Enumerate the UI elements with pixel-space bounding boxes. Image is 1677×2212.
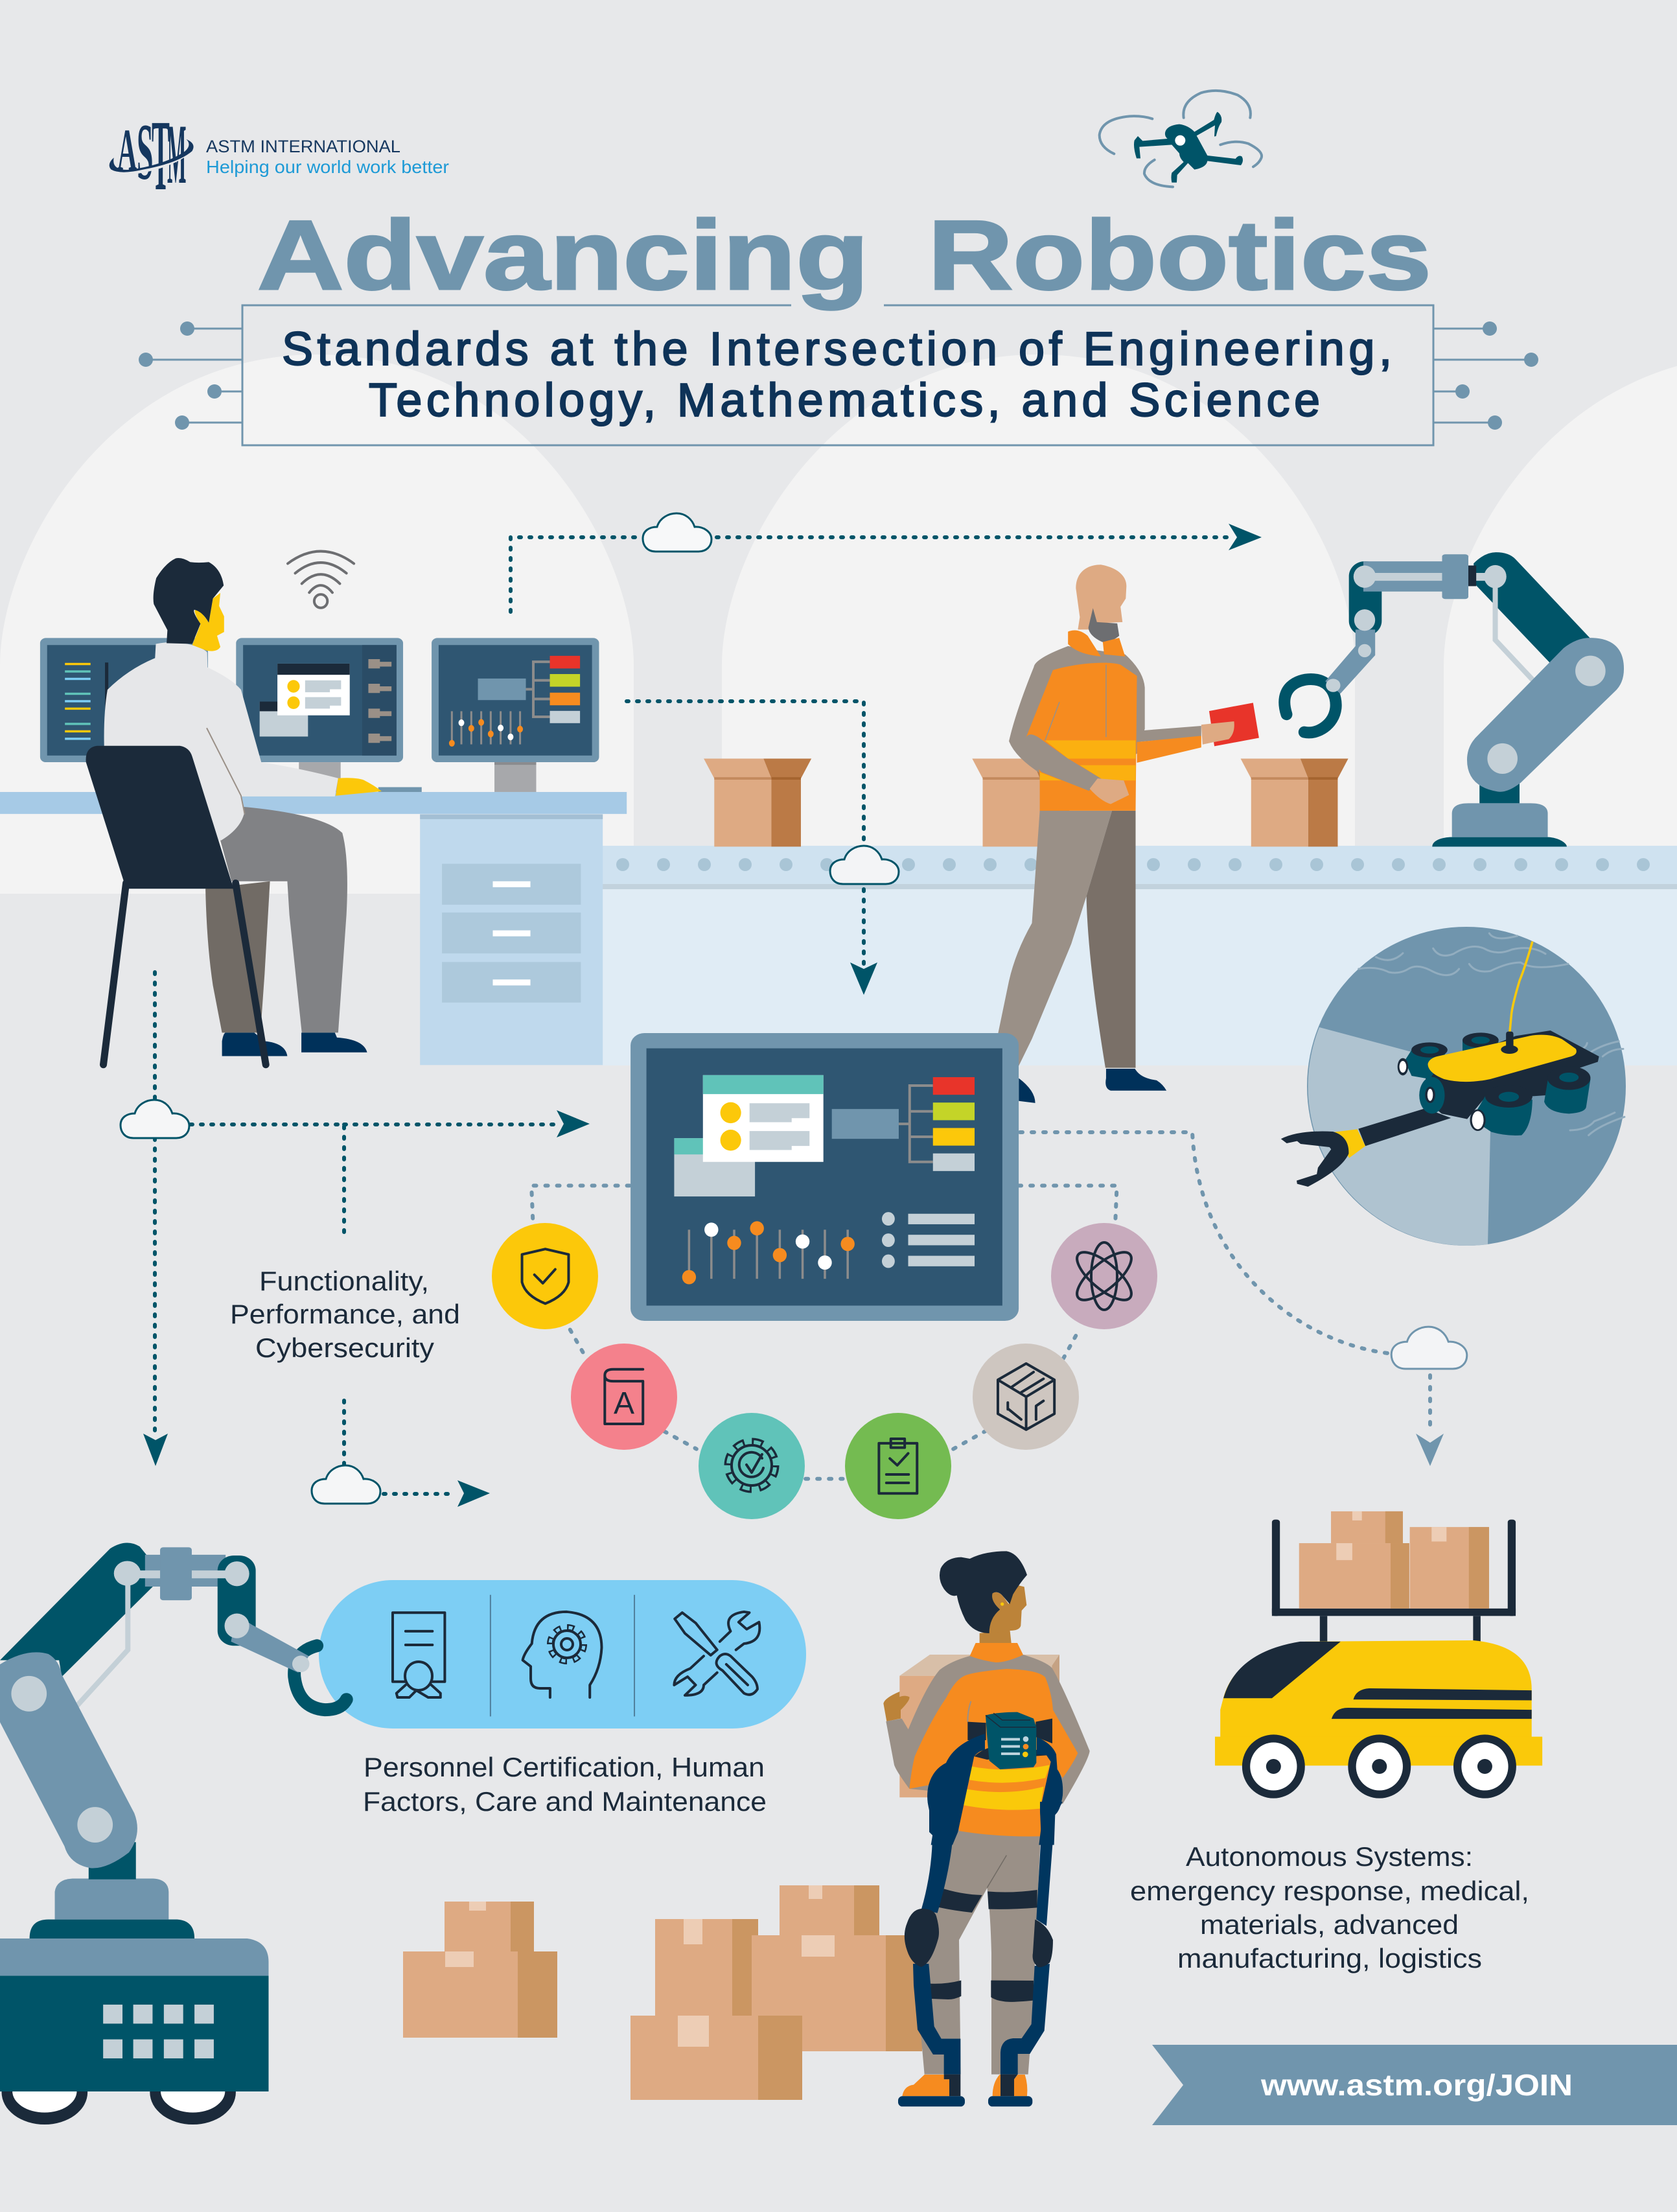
label: autonomous systems: manufacturing, logistics <box>1177 1943 1482 1973</box>
connector: dashboard to autonomous systems with cloud <box>1020 1132 1467 1466</box>
logo wordmark: ASTM INTERNATIONAL <box>206 137 400 156</box>
monitor: dashboard <box>432 638 599 762</box>
label: personnel certification <box>363 1752 767 1817</box>
logo mark: A <box>117 117 137 183</box>
seated engineer on chair <box>86 558 382 1065</box>
monitor: code lines <box>40 638 208 762</box>
cardboard boxes: large stack <box>630 1885 922 2100</box>
title: Advancing <box>257 200 869 310</box>
desk with cabinet <box>0 762 627 1065</box>
trousers <box>914 1828 1041 2075</box>
carried box and upper body <box>883 1551 1090 1845</box>
label: autonomous systems: materials, advanced <box>1200 1909 1459 1940</box>
logo mark <box>110 99 194 211</box>
icon: book with letter <box>571 1344 677 1450</box>
subtitle <box>282 323 1392 426</box>
worker in exoskeleton carrying box <box>883 1551 1090 2106</box>
label: personnel certification: Factors, Care and Maintenance <box>363 1786 767 1817</box>
banner: join link: www.astm.org/JOIN <box>1260 2068 1573 2102</box>
central dashboard monitor <box>630 1033 1019 1321</box>
title: Robotics <box>928 200 1431 310</box>
label: autonomous systems <box>1130 1841 1529 1973</box>
label: personnel certification: Personnel Certification, Human <box>364 1752 765 1782</box>
logo mark: T <box>152 99 170 211</box>
background arches <box>0 355 1677 894</box>
pill: personnel, human factors, maintenance icons <box>319 1580 806 1729</box>
tether <box>1510 942 1532 1032</box>
banner: join link <box>1152 2045 1677 2125</box>
label: autonomous systems: Autonomous Systems: <box>1186 1841 1473 1872</box>
robot arm on mobile base: left <box>0 1543 347 2125</box>
logo mark: M <box>167 107 186 202</box>
robot arm: top right <box>1284 552 1624 846</box>
subtitle frame with circuit pins <box>139 305 1538 445</box>
logo: ASTM International <box>110 99 400 211</box>
icon: circuit cube <box>973 1344 1079 1450</box>
connector: monitor to robot, with cloud <box>511 513 1262 612</box>
title <box>257 200 1431 310</box>
waves <box>1359 933 1625 1135</box>
icon: clipboard <box>845 1413 951 1519</box>
icon: gear with check <box>699 1413 805 1519</box>
conveyor belt <box>603 846 1677 1065</box>
ROV body and claw <box>1281 1030 1599 1187</box>
label: functionality <box>230 1266 460 1363</box>
subtitle: Standards at the Intersection of Engineering, <box>282 323 1392 375</box>
autonomous cart with boxes <box>1215 1511 1542 1799</box>
icon: crossed tools <box>674 1612 759 1695</box>
connector: lower branch with cloud <box>312 1401 490 1507</box>
icon: certificate <box>393 1612 445 1697</box>
icon: wifi <box>288 552 354 608</box>
exoskeleton legs, bands and boots <box>898 1802 1063 2106</box>
conveyor boxes <box>704 758 1348 846</box>
subtitle: Technology, Mathematics, and Science <box>369 375 1320 426</box>
logo tagline: Helping our world work better <box>206 157 449 177</box>
walking worker with red card <box>998 565 1259 1103</box>
monitor: windows <box>236 638 403 762</box>
connector: left vertical with cloud and branch <box>121 972 590 1466</box>
label: functionality: Cybersecurity <box>255 1333 434 1363</box>
icon: drone <box>1100 91 1262 187</box>
icon: book with letter: A <box>614 1386 634 1421</box>
icon: head with gear <box>523 1612 601 1697</box>
label: functionality: Performance, and <box>230 1299 460 1329</box>
label: functionality: Functionality, <box>259 1266 429 1296</box>
label: autonomous systems: emergency response, medical, <box>1130 1876 1529 1906</box>
underwater ROV scene <box>1281 927 1626 1246</box>
cardboard boxes: small stack <box>403 1902 557 2038</box>
logo mark: S <box>137 108 154 197</box>
icon: atom <box>1051 1223 1157 1329</box>
dashed ring connecting standards icons <box>531 1185 1117 1479</box>
connector: monitor to central dashboard, with cloud <box>627 701 899 995</box>
icon: shield check <box>492 1223 598 1329</box>
